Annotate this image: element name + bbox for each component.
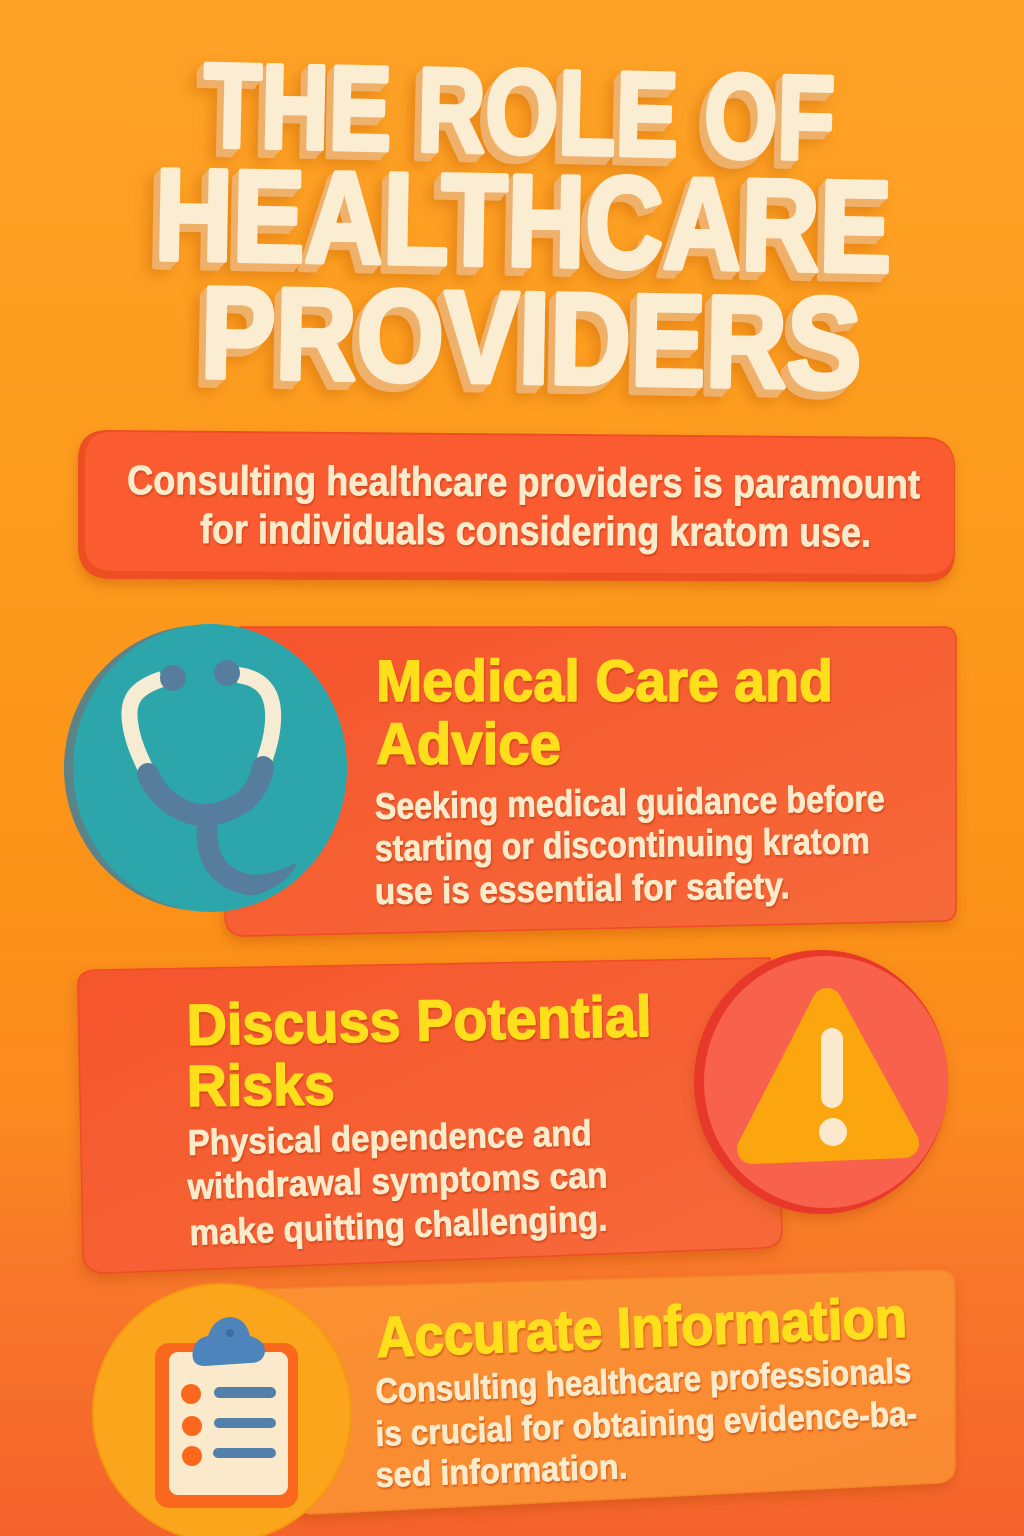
heading: medical care: Advice xyxy=(376,712,561,777)
body: risks xyxy=(186,1112,608,1253)
heading: risks xyxy=(186,984,652,1119)
heading: risks: Discuss Potential xyxy=(186,984,652,1058)
body: risks: Physical dependence and xyxy=(187,1112,592,1163)
body: medical care xyxy=(374,778,885,912)
body: medical care: Seeking medical guidance before xyxy=(374,778,885,827)
heading: medical care: Medical Care and xyxy=(376,649,833,714)
panel: medical care and advice xyxy=(64,624,956,936)
body: accurate information xyxy=(375,1351,918,1495)
icon: warning triangle xyxy=(694,950,948,1214)
icon: stethoscope xyxy=(64,624,347,912)
body: risks: make quitting challenging. xyxy=(189,1197,608,1253)
title: HEALTHCARE xyxy=(154,141,893,300)
body: risks: withdrawal symptoms can xyxy=(186,1154,608,1207)
intro text: Consulting healthcare providers is paramount xyxy=(127,457,920,507)
panel: intro xyxy=(78,430,955,582)
title: PROVIDERS xyxy=(200,259,863,417)
title: THE ROLE OF xyxy=(202,39,836,185)
heading: accurate information: Accurate Information xyxy=(375,1286,908,1370)
body: accurate information: is crucial for obtaining evidence-ba- xyxy=(375,1394,918,1454)
heading: medical care xyxy=(376,649,833,777)
body: medical care: starting or discontinuing kratom xyxy=(374,820,870,869)
intro text: for individuals considering kratom use. xyxy=(200,506,871,556)
body: accurate information: Consulting healthcare professionals xyxy=(375,1351,912,1411)
title xyxy=(154,39,893,417)
heading: risks: Risks xyxy=(186,1052,335,1119)
body: medical care: use is essential for safety. xyxy=(375,865,790,912)
icon: clipboard xyxy=(93,1284,351,1536)
panel: discuss potential risks xyxy=(78,950,948,1273)
intro text xyxy=(127,457,920,556)
panel: accurate information xyxy=(93,1270,955,1536)
body: accurate information: sed information. xyxy=(375,1447,628,1495)
